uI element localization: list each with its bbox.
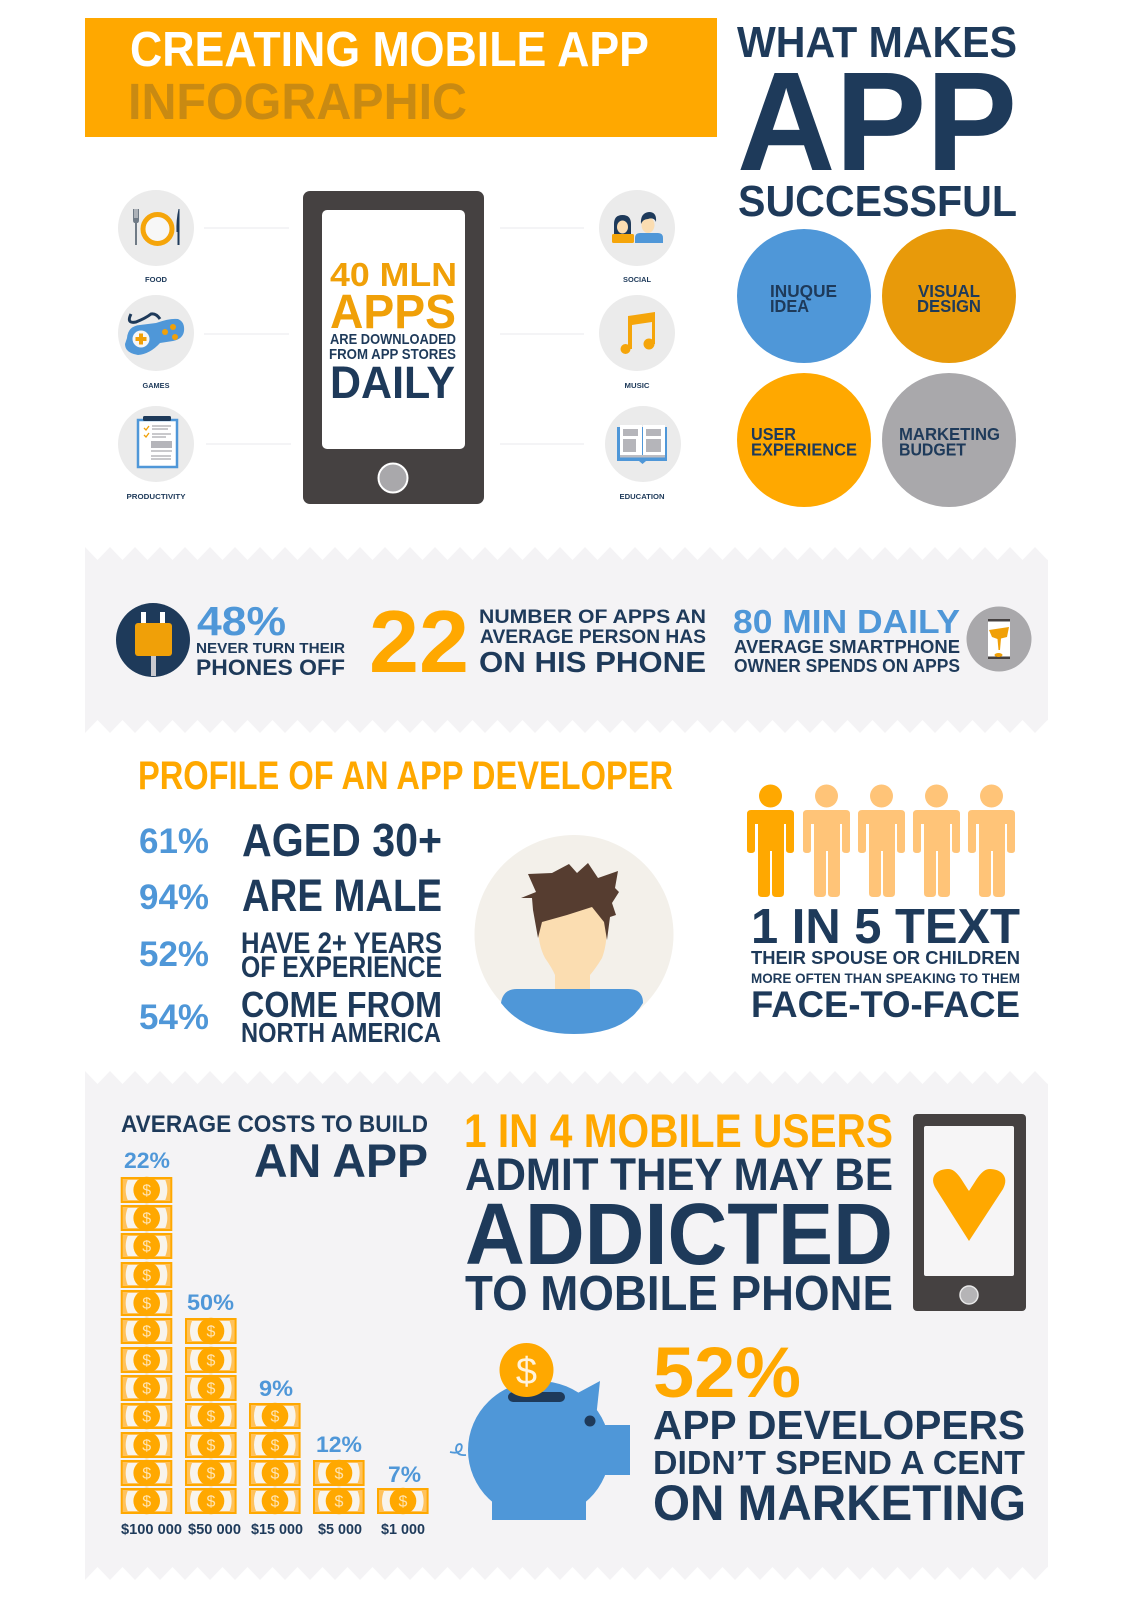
chart column: $5 000: $ — [335, 1494, 344, 1510]
stat: one in five text — [751, 900, 1020, 1025]
stat: one in five text: MORE OFTEN THAN SPEAKING TO THEM — [751, 971, 1020, 987]
chart column: $100 000: $ — [142, 1438, 151, 1454]
icon: productivity: PRODUCTIVITY — [126, 492, 186, 501]
phone text: ARE DOWNLOADED — [330, 332, 456, 348]
title line 1: CREATING MOBILE APP — [130, 23, 649, 77]
stat: 52% developers marketing: APP DEVELOPERS — [653, 1402, 1025, 1448]
icon: music — [599, 295, 675, 390]
circle: visual design: VISUAL — [918, 281, 980, 301]
chart column: $5 000: 12% — [316, 1432, 362, 1457]
stat: 48%: 48% — [197, 598, 286, 644]
stat: 52% developers marketing: DIDN’T SPEND A CENT — [653, 1444, 1025, 1481]
chart column: $100 000: $ — [142, 1408, 151, 1426]
chart column: $100 000 — [121, 1148, 182, 1538]
row: location: COME FROM — [241, 984, 442, 1025]
icon: phone with heart — [913, 1114, 1026, 1311]
chart column: $50 000: $ — [207, 1438, 216, 1454]
circle: user experience: USER — [751, 424, 796, 444]
chart column: $100 000: $ — [142, 1268, 151, 1284]
chart column: $15 000: $ — [271, 1466, 280, 1482]
icon: food: FOOD — [145, 275, 168, 284]
chart column: $100 000: $ — [142, 1352, 151, 1370]
circle: unique idea — [737, 229, 871, 363]
phone text: FROM APP STORES — [329, 347, 456, 363]
central phone — [303, 191, 484, 504]
icon: education — [605, 406, 681, 501]
stat: addicted to mobile phone: ADDICTED — [465, 1186, 893, 1283]
chart column: $5 000 — [313, 1432, 365, 1538]
chart column: $15 000 — [249, 1376, 303, 1538]
avatar: developer — [474, 835, 674, 1034]
stat: 22: 22 — [369, 592, 469, 691]
chart column: $50 000: $ — [207, 1380, 216, 1398]
stat: addicted to mobile phone: 1 IN 4 MOBILE USERS — [464, 1104, 893, 1157]
stat: 22 — [369, 592, 706, 691]
stat: one in five text: 1 IN 5 TEXT — [751, 900, 1020, 954]
chart column: $100 000: $ — [142, 1494, 151, 1510]
icon: education: EDUCATION — [620, 492, 664, 501]
icon: phone hourglass — [966, 606, 1032, 672]
chart column: $50 000 — [185, 1290, 241, 1538]
chart column: $15 000: $15 000 — [251, 1521, 303, 1538]
title banner — [85, 18, 717, 137]
phone text: APPS — [330, 286, 456, 339]
row: aged: AGED 30+ — [242, 814, 442, 866]
chart column: $1 000: $1 000 — [381, 1521, 425, 1538]
success factor circles — [737, 229, 1016, 507]
coin — [500, 1343, 554, 1397]
chart column: $15 000: 9% — [259, 1376, 293, 1401]
circle: unique idea: INUQUE — [770, 281, 837, 301]
chart column: $50 000: 50% — [187, 1290, 234, 1315]
chart column: $1 000: 7% — [388, 1462, 421, 1487]
phone text: 40 MLN — [330, 256, 457, 293]
stat: 48%: NEVER TURN THEIR — [196, 640, 345, 657]
chart column: $100 000: $ — [142, 1210, 151, 1228]
stat: 80 min daily: OWNER SPENDS ON APPS — [734, 655, 960, 676]
stat: one in five text: FACE-TO-FACE — [751, 984, 1020, 1025]
icon: food — [118, 190, 194, 284]
chart column: $50 000: $ — [207, 1494, 216, 1510]
chart column: $100 000: $ — [142, 1182, 151, 1200]
stat: addicted to mobile phone: TO MOBILE PHONE — [465, 1267, 893, 1321]
chart column: $50 000: $ — [207, 1466, 216, 1482]
chart column: $50 000: $ — [207, 1352, 216, 1370]
icon: music: MUSIC — [624, 381, 650, 390]
circle: visual design — [882, 229, 1016, 363]
title line 2: INFOGRAPHIC — [128, 73, 467, 130]
row: experience: 52% — [139, 935, 209, 974]
chart column: $1 000 — [377, 1462, 429, 1538]
stat: 48%: PHONES OFF — [196, 655, 345, 680]
panel: costs and addiction — [85, 1071, 1048, 1580]
stat: 22: NUMBER OF APPS AN — [479, 606, 706, 628]
phone text: DAILY — [330, 357, 455, 408]
stat: addicted to mobile phone: ADMIT THEY MAY BE — [465, 1149, 893, 1200]
row: male: ARE MALE — [242, 870, 442, 921]
icon: social: SOCIAL — [623, 275, 651, 284]
chart column: $1 000: $ — [399, 1494, 408, 1510]
chart column: $100 000: $ — [142, 1466, 151, 1482]
circle: visual design: DESIGN — [917, 296, 981, 316]
row: male — [139, 870, 442, 921]
chart column: $5 000: $ — [335, 1466, 344, 1482]
heading: what makes app successful: WHAT MAKES — [737, 19, 1017, 67]
heading: average costs: AVERAGE COSTS TO BUILD — [121, 1111, 428, 1138]
circle: marketing budget: MARKETING — [899, 424, 1000, 444]
row: location: NORTH AMERICA — [241, 1017, 441, 1048]
stat: 80 min daily: 80 MIN DAILY — [733, 603, 960, 640]
stat: 80 min daily — [733, 603, 960, 676]
stat: 48% — [196, 598, 345, 680]
circle: marketing budget — [882, 373, 1016, 507]
row: aged: 61% — [139, 822, 209, 861]
row: experience: HAVE 2+ YEARS — [241, 927, 442, 960]
chart column: $100 000: 22% — [124, 1148, 170, 1173]
chart column: $5 000: $5 000 — [318, 1521, 362, 1538]
circle: marketing budget: BUDGET — [899, 440, 966, 460]
chart column: $100 000: $ — [142, 1238, 151, 1256]
icon: plug — [116, 603, 190, 677]
row: experience: OF EXPERIENCE — [241, 951, 442, 984]
icon: productivity — [118, 406, 194, 501]
icon: social — [599, 190, 675, 284]
circle: user experience — [737, 373, 871, 507]
icon: games — [118, 295, 194, 390]
chart column: $15 000: $ — [271, 1494, 280, 1510]
heading: PROFILE OF AN APP DEVELOPER — [138, 754, 673, 798]
circle: user experience: EXPERIENCE — [751, 440, 857, 460]
stat: 52% developers marketing: ON MARKETING — [653, 1475, 1026, 1531]
stat: 22: AVERAGE PERSON HAS — [480, 627, 706, 648]
stat: 52% developers marketing — [653, 1334, 1026, 1531]
chart column: $50 000: $50 000 — [188, 1521, 241, 1538]
stat: 80 min daily: AVERAGE SMARTPHONE — [734, 636, 960, 657]
chart column: $100 000: $ — [142, 1324, 151, 1340]
circle: unique idea: IDEA — [770, 296, 809, 316]
stat: 22: ON HIS PHONE — [479, 647, 706, 679]
band: phone usage stats — [85, 547, 1048, 733]
stat: addicted to mobile phone — [464, 1104, 893, 1321]
chart column: $100 000: $ — [142, 1296, 151, 1312]
pictogram: one in five people — [747, 784, 1015, 897]
chart column: $15 000: $ — [271, 1408, 280, 1426]
stat: one in five text: THEIR SPOUSE OR CHILDREN — [751, 947, 1020, 968]
coin: $ — [516, 1351, 537, 1393]
heading: average costs — [121, 1111, 428, 1187]
stat: 52% developers marketing: 52% — [653, 1334, 801, 1413]
chart column: $100 000: $100 000 — [121, 1521, 182, 1538]
section: profile of an app developer — [138, 754, 673, 1048]
row: location: 54% — [139, 998, 209, 1037]
heading: what makes app successful: SUCCESSFUL — [738, 177, 1017, 226]
row: experience — [139, 927, 442, 984]
chart column: $15 000: $ — [271, 1438, 280, 1454]
chart column: $50 000: $ — [207, 1408, 216, 1426]
row: location — [139, 984, 442, 1048]
icon: piggy bank — [450, 1343, 630, 1520]
heading: what makes app successful: APP — [737, 42, 1017, 200]
icon: games: GAMES — [142, 381, 170, 390]
row: aged — [139, 814, 442, 866]
row: male: 94% — [139, 878, 209, 917]
chart column: $100 000: $ — [142, 1380, 151, 1398]
heading: average costs: AN APP — [254, 1134, 428, 1187]
phone text — [329, 256, 457, 408]
chart column: $50 000: $ — [207, 1324, 216, 1340]
